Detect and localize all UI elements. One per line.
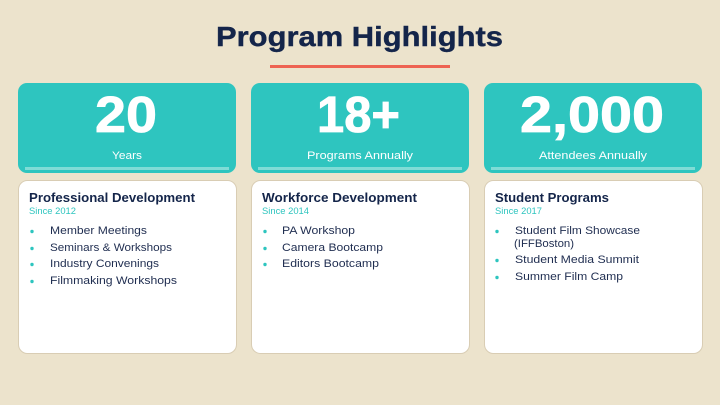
panel: student programs: Summer Film Camp: [515, 271, 623, 283]
panel: professional development: Since 2012: [29, 206, 76, 217]
panel: student programs: (IFFBoston): [514, 238, 574, 250]
stat card: 18+ programs: [251, 83, 469, 173]
panel: student programs: Since 2017: [495, 206, 542, 217]
panel: professional development: Member Meetings: [50, 225, 147, 237]
panel: student programs: Student Media Summit: [515, 254, 640, 266]
stat card: 2,000 attendees: Attendees Annually: [539, 150, 647, 162]
stat card: 2,000 attendees: 2,000: [520, 86, 664, 143]
panel: student programs: [484, 180, 702, 354]
panel: student programs: Student Film Showcase: [515, 225, 640, 237]
panel: professional development: Industry Convenings: [50, 258, 159, 270]
panel: workforce development: Since 2014: [262, 206, 309, 217]
panel: professional development: Seminars & Workshops: [50, 242, 172, 254]
stat card: 2,000 attendees: [484, 83, 702, 173]
stat card: 20 years: Years: [112, 150, 142, 162]
stat card: 20 years: 20: [95, 86, 157, 143]
panel: professional development: Professional Development: [29, 190, 196, 205]
panel: workforce development: Workforce Development: [262, 190, 418, 205]
panel: workforce development: [252, 180, 470, 354]
panel: workforce development: Editors Bootcamp: [282, 258, 379, 270]
stat card: 18+ programs: 18+: [317, 86, 400, 143]
panel: student programs: Student Programs: [495, 190, 609, 205]
stat card: 20 years: [18, 83, 236, 173]
title underline: [270, 65, 450, 68]
stat card: 18+ programs: Programs Annually: [307, 150, 413, 162]
title: Program Highlights: [216, 21, 503, 52]
panel: professional development: Filmmaking Workshops: [50, 275, 177, 287]
panel: workforce development: PA Workshop: [282, 225, 355, 237]
panel: professional development: [18, 180, 236, 354]
panel: workforce development: Camera Bootcamp: [282, 242, 383, 254]
